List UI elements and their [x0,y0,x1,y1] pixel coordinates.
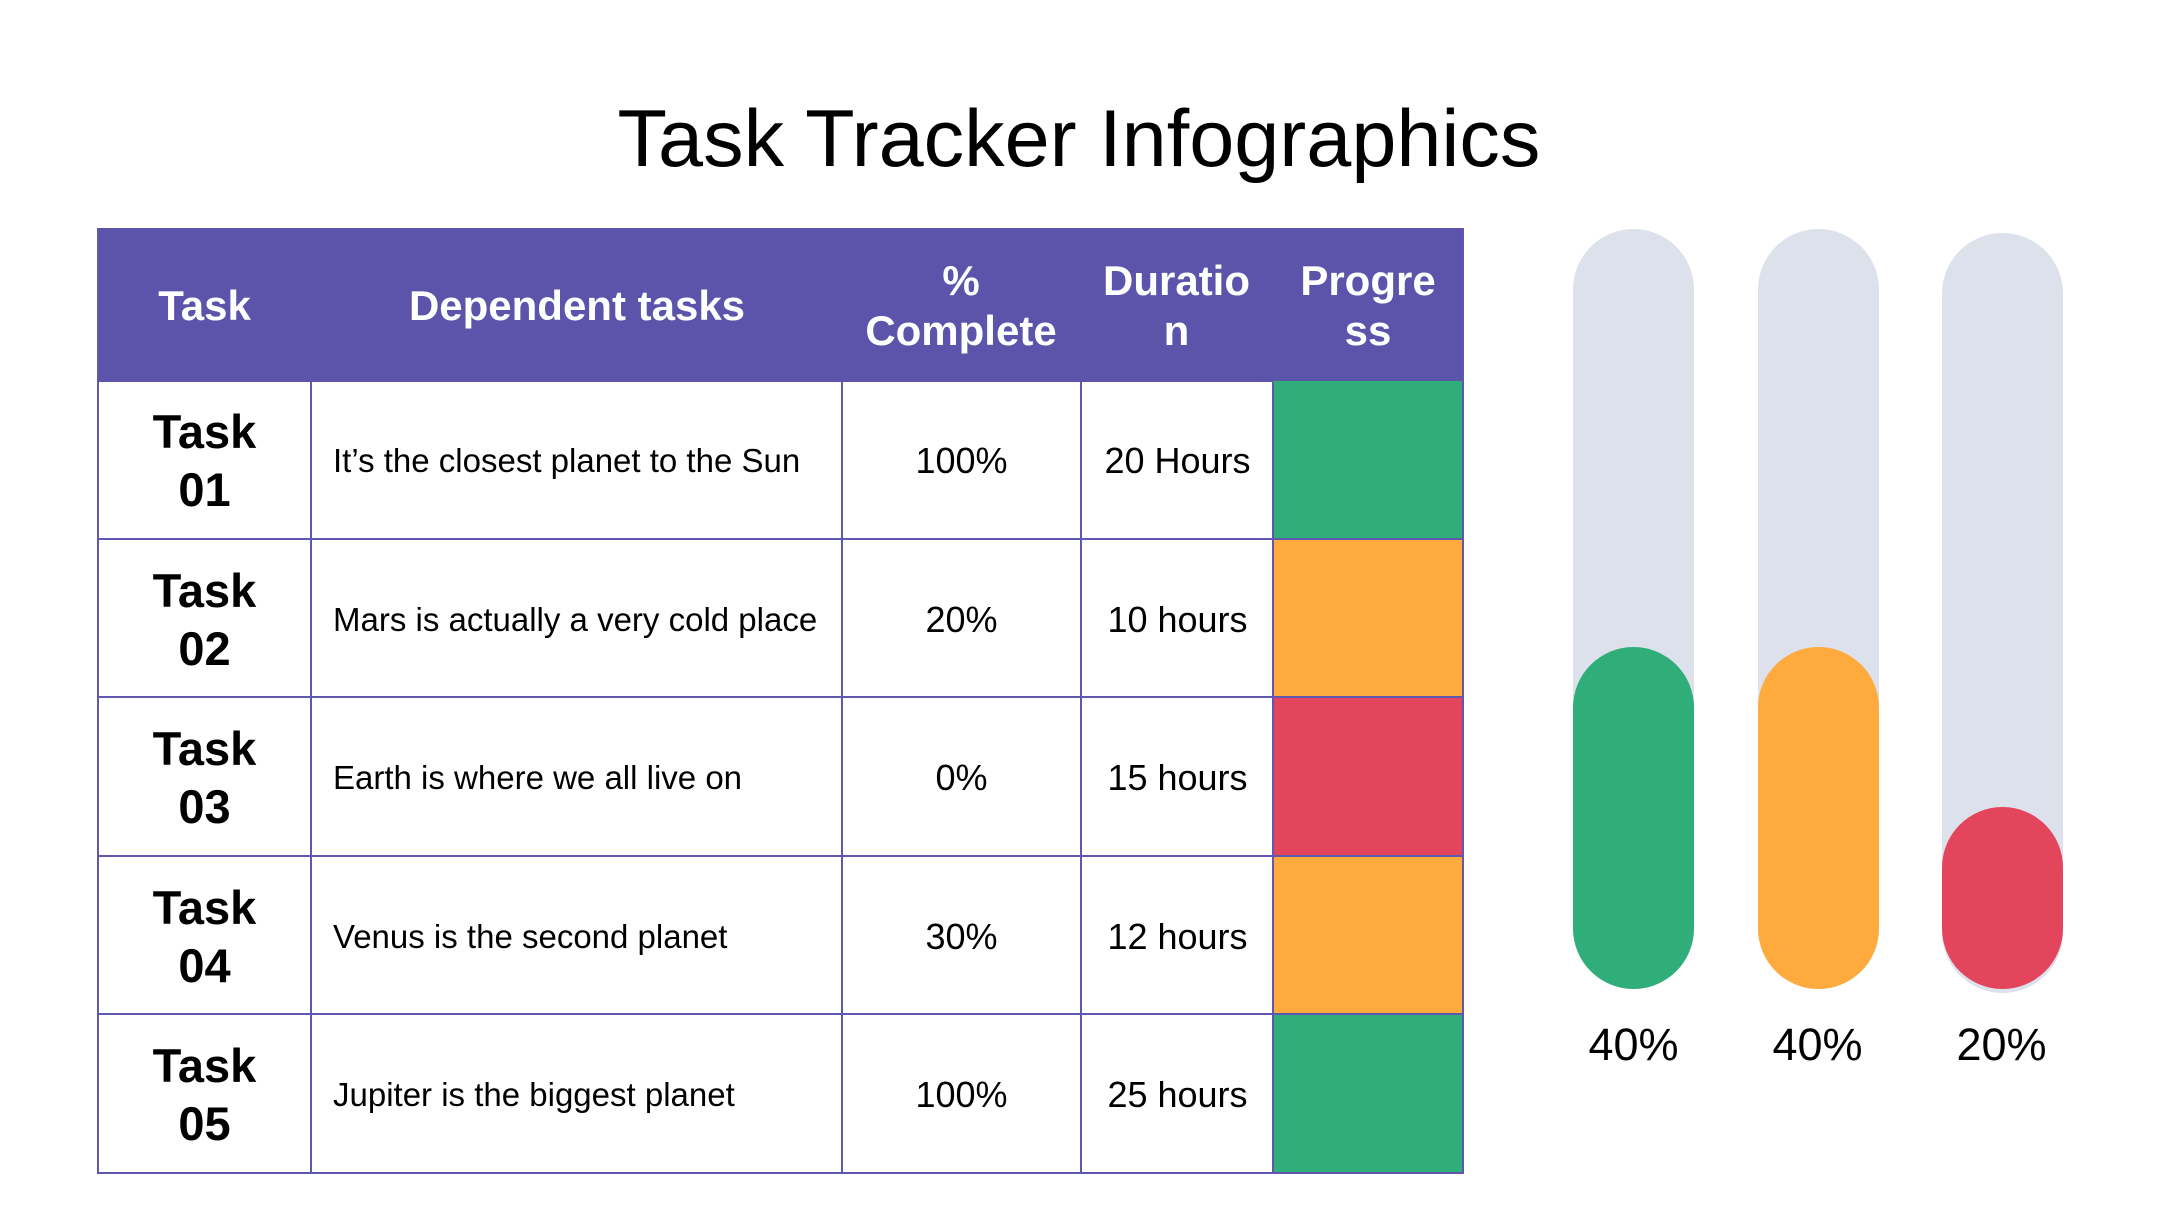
red fill [1942,807,2063,989]
task 03 percent: 0% [935,756,988,798]
task 03 name: 03 [178,780,231,832]
task 02 percent: 20% [925,598,998,640]
task 01 name: Task [153,405,256,458]
task 03 description: Earth is where we all live on [333,759,742,796]
task 01 name: 01 [178,462,231,516]
header: Progress: ss [1345,307,1391,354]
task 05 name: Task [153,1039,256,1092]
label: orange 40%: 40% [1772,1019,1863,1070]
bar: red 20% [1942,233,2063,993]
task 04 progress swatch [1273,857,1463,1016]
task 01 name [153,405,256,516]
header: % Complete: Complete [865,307,1057,354]
task 04 name: 04 [178,938,231,992]
task 04 description: Venus is the second planet [333,918,727,955]
bar: orange 40% [1758,229,1879,989]
task 01 percent: 100% [915,440,1008,480]
row: task 01 [153,381,1462,538]
task 05 percent: 100% [915,1074,1008,1114]
task 03 name [153,722,256,832]
task 05 description: Jupiter is the biggest planet [333,1076,735,1113]
label: green 40%: 40% [1588,1019,1679,1070]
task 05 name [153,1039,256,1150]
task 03 duration: 15 hours [1107,756,1248,798]
row: task 05 [153,1015,1462,1172]
label: red 20%: 20% [1956,1019,2047,1070]
task 04 name [153,881,256,992]
header: Dependent tasks: Dependent tasks [409,282,745,329]
task 05 progress swatch [1273,1015,1463,1174]
header: % Complete [865,257,1057,354]
row: task 02 [153,540,1462,696]
task 02 progress swatch [1273,540,1463,699]
green fill [1573,647,1694,989]
header: Duration [1103,257,1250,354]
task 04 duration: 12 hours [1107,916,1248,956]
header: Duration: Duratio [1103,257,1250,304]
task 04 percent: 30% [925,916,998,956]
header: Progress [1300,257,1436,354]
header: Duration: n [1164,307,1189,354]
task 03 name: Task [153,722,256,775]
task 05 duration: 25 hours [1107,1074,1248,1114]
task 02 description: Mars is actually a very cold place [333,601,817,638]
row: task 04 [153,857,1462,1013]
task 03 progress swatch [1273,698,1463,857]
orange fill [1758,647,1879,989]
task 02 duration: 10 hours [1107,598,1248,640]
green track [1573,229,1694,989]
title: Task Tracker Infographics [618,94,1540,184]
header: Task: Task [158,282,251,329]
red track [1942,233,2063,993]
bar: green 40% [1573,229,1694,989]
orange track [1758,229,1879,989]
task 02 name: 02 [178,622,231,674]
task 04 name: Task [153,881,256,934]
header: Progress: Progre [1300,257,1436,304]
table header background [97,228,1464,382]
task 02 name [153,564,256,674]
task 01 progress swatch [1273,381,1463,540]
task 02 name: Task [153,564,256,617]
task 05 name: 05 [178,1096,231,1150]
row: task 03 [153,698,1462,855]
task 01 duration: 20 Hours [1104,440,1251,480]
panel: task table [99,228,1462,382]
task 01 description: It’s the closest planet to the Sun [333,442,800,479]
header: % Complete: % [942,257,980,304]
